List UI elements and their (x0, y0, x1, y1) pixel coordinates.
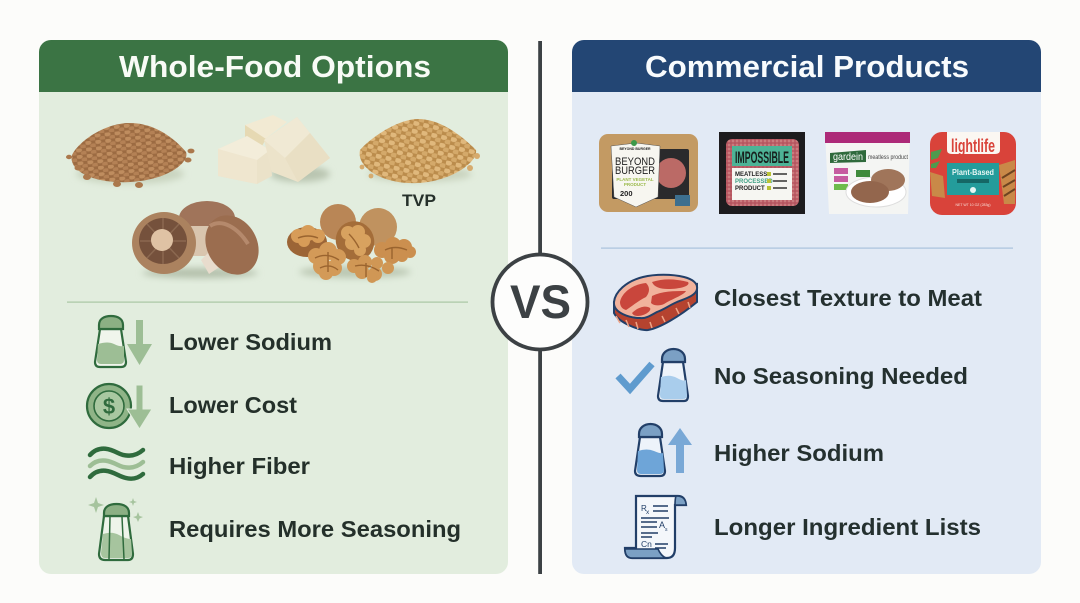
product: impossible: PRODUCT (735, 186, 765, 192)
product: beyond burger: BEYOND (615, 156, 655, 168)
VS badge: VS (510, 275, 571, 328)
image: tofu (218, 115, 330, 184)
VS badge (492, 254, 588, 350)
heading: whole-food options (39, 40, 508, 92)
product: beyond burger: BURGER (615, 165, 655, 177)
panel: commercial products (572, 40, 1041, 574)
icon: ingredient list scroll: Cn (641, 539, 652, 549)
heading: whole-food options: Whole-Food Options (119, 50, 431, 84)
product: beyond burger: BEYOND BURGER (619, 147, 651, 151)
product: lightlife: NET WT 10 OZ (283g) (955, 203, 991, 207)
icon: steak (614, 275, 697, 330)
icon: ingredient list scroll: R (641, 504, 647, 513)
icon: salt shaker with down arrow (95, 316, 152, 367)
icon: ingredient list scroll: A (659, 520, 665, 530)
product: beyond burger: PLANT VEGETAL (616, 177, 654, 182)
product: lightlife (930, 132, 1016, 215)
text: higher sodium: Higher Sodium (714, 440, 884, 466)
icon: ingredient list scroll (625, 496, 686, 558)
divider (67, 302, 468, 303)
image: lentils (66, 123, 194, 188)
product: gardein: gardein (833, 152, 863, 163)
text: higher fiber: Higher Fiber (169, 453, 310, 479)
icon: coin with down arrow (87, 384, 152, 429)
heading: commercial products: Commercial Products (645, 50, 969, 84)
icon: salt shaker with sparkles (88, 497, 143, 560)
product: lightlife: Plant-Based (952, 168, 994, 177)
product: impossible: MEATLESS (735, 172, 767, 178)
text: lower sodium: Lower Sodium (169, 329, 332, 355)
divider (601, 248, 1013, 249)
icon: salt shaker with up arrow (635, 424, 692, 476)
product: beyond burger: 200 (620, 189, 633, 198)
product: beyond burger: PRODUCT (624, 182, 646, 187)
icon: coin with down arrow: $ (103, 394, 115, 419)
text: lower cost: Lower Cost (169, 392, 297, 418)
icon: ingredient list scroll: s (665, 527, 668, 533)
text: longer ingredient lists: Longer Ingredient Lists (714, 514, 981, 540)
panel: whole-food options (39, 40, 508, 574)
text: no seasoning needed: No Seasoning Needed (714, 363, 968, 389)
text: closest texture to meat: Closest Texture to Meat (714, 285, 982, 311)
text: requires more seasoning: Requires More Seasoning (169, 516, 461, 542)
image: textured vegetable protein (360, 119, 480, 183)
product: impossible (719, 132, 805, 214)
icon: fiber waves (90, 449, 143, 479)
label: TVP: TVP (402, 192, 436, 210)
product: gardein: meatless product (868, 154, 908, 161)
center divider line (538, 41, 542, 574)
heading: commercial products (572, 40, 1041, 92)
product: gardein (825, 132, 910, 214)
image: mushrooms (132, 201, 269, 284)
icon: ingredient list scroll: x (646, 509, 650, 516)
icon: check and salt shaker (618, 349, 688, 401)
product: lightlife: lightlife (951, 136, 995, 156)
product: impossible: PROCESSED (735, 179, 773, 185)
image: walnuts (287, 204, 416, 283)
product: beyond burger (599, 134, 698, 212)
product: impossible: IMPOSSIBLE (735, 148, 789, 167)
